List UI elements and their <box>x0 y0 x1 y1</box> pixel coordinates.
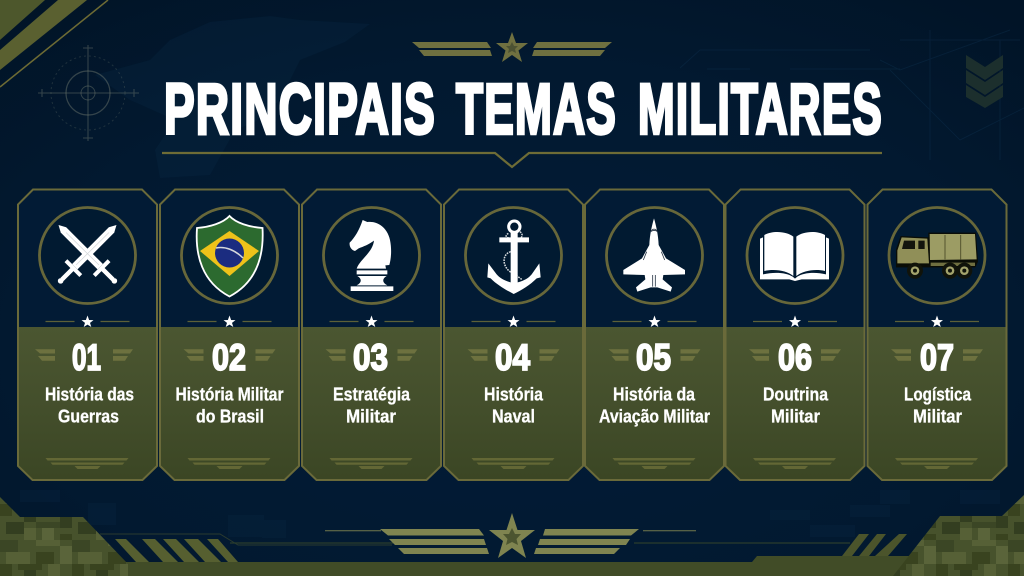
number: 05 <box>636 337 671 378</box>
icon: fighter jet <box>623 218 685 292</box>
top-left stripes <box>0 0 108 87</box>
circuit watermark <box>680 30 1024 160</box>
card 6 <box>726 190 864 480</box>
label <box>599 384 710 426</box>
icon: military truck <box>896 233 978 279</box>
number <box>35 337 133 378</box>
title: MILITARES <box>638 70 883 150</box>
number <box>608 337 700 378</box>
label <box>484 384 544 426</box>
label: História das <box>45 384 134 404</box>
label <box>45 384 134 426</box>
number: 03 <box>353 337 388 378</box>
bottom band <box>120 556 910 576</box>
card 1 <box>18 190 157 480</box>
icon: open book <box>760 232 829 281</box>
label: Estratégia <box>333 384 411 404</box>
card 4 <box>444 190 583 480</box>
number <box>326 337 418 378</box>
icon: anchor <box>487 221 541 294</box>
reticle watermark <box>38 45 139 141</box>
label <box>333 384 411 426</box>
label <box>763 384 829 426</box>
number: 02 <box>212 337 246 378</box>
title underline <box>162 153 882 167</box>
label: História <box>484 384 544 404</box>
label: Aviação Militar <box>599 406 710 426</box>
number: 04 <box>495 337 530 378</box>
faint pixel camo watermark <box>20 490 1000 538</box>
number <box>184 337 276 378</box>
number <box>749 337 841 378</box>
icon: chess knight <box>350 220 393 291</box>
label: História Militar <box>176 384 284 404</box>
top star ornament <box>412 32 612 62</box>
label: do Brasil <box>196 406 264 426</box>
left camo corner <box>0 497 128 576</box>
number: 01 <box>72 337 101 378</box>
label: Logística <box>904 384 972 404</box>
card 5 <box>585 190 724 480</box>
number <box>891 337 983 378</box>
label: História da <box>613 384 696 404</box>
world map watermark <box>95 16 370 178</box>
number <box>468 337 560 378</box>
label <box>176 384 284 426</box>
label: Militar <box>346 406 396 426</box>
title: PRINCIPAIS <box>164 70 436 150</box>
number: 06 <box>778 337 812 378</box>
card 7 <box>868 190 1006 480</box>
label: Naval <box>492 406 535 426</box>
left hazard stripes <box>100 534 392 562</box>
chevron rank insignia <box>966 55 1003 108</box>
title: TEMAS <box>456 70 617 150</box>
card 2 <box>160 190 299 480</box>
right camo corner <box>893 495 1024 576</box>
label: Guerras <box>58 406 119 426</box>
icon: brazil shield <box>197 216 263 296</box>
right hazard stripes <box>842 534 907 556</box>
bottom star ornament <box>230 513 850 558</box>
title <box>164 70 883 150</box>
label: Militar <box>771 406 820 426</box>
label: Militar <box>913 406 962 426</box>
icon: crossed swords <box>51 218 124 290</box>
label: Doutrina <box>763 384 829 404</box>
label <box>904 384 972 426</box>
number: 07 <box>920 337 954 378</box>
card 3 <box>302 190 441 480</box>
